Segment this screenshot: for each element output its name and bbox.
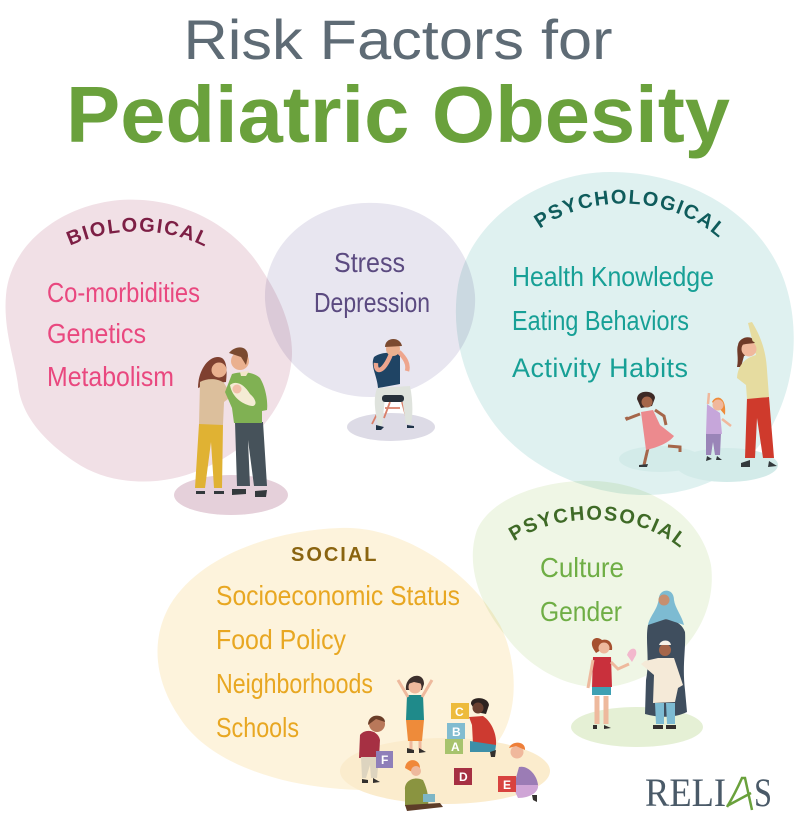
text block: psychosocial: [508, 506, 682, 627]
logo: Relias: [645, 770, 772, 815]
text block: social: SOCIAL: [291, 544, 378, 566]
text block: stress: Depression: [314, 287, 430, 318]
panel: stress blob: [265, 203, 475, 397]
icon: children with alphabet blocks: B: [452, 725, 461, 739]
icon: woman and children exercising: [619, 322, 778, 482]
text block: social: Schools: [216, 712, 299, 743]
icon: children with alphabet blocks: D: [459, 770, 468, 784]
icon: stressed man on chair: [347, 339, 435, 441]
text block: psychological: Activity Habits: [512, 353, 688, 383]
logo: Relias: S: [754, 770, 772, 815]
icon: family with baby: [174, 347, 288, 515]
text block: psychosocial: PSYCHOSOCIAL: [508, 506, 682, 548]
text block: social: Socioeconomic Status: [216, 580, 460, 611]
text block: biological: [47, 218, 206, 392]
text block: psychosocial: Culture: [540, 552, 624, 583]
text block: biological: Genetics: [47, 318, 146, 349]
icon: children with alphabet blocks: A: [451, 740, 460, 754]
text block: psychological: [512, 190, 722, 383]
title: Risk Factors for: [184, 8, 612, 71]
text block: social: Neighborhoods: [216, 668, 373, 699]
icon: children with alphabet blocks: F: [381, 753, 388, 767]
text block: biological: BIOLOGICAL: [66, 218, 206, 246]
text block: stress: Stress: [334, 247, 405, 278]
icon: children with alphabet blocks: E: [503, 778, 511, 792]
text block: biological: Metabolism: [47, 361, 174, 392]
text block: stress: [314, 247, 430, 318]
panel: psychosocial blob: [473, 481, 712, 687]
title: Pediatric Obesity: [66, 70, 731, 159]
text block: psychological: Health Knowledge: [512, 261, 714, 292]
text block: psychosocial: Gender: [540, 596, 622, 627]
panel: psychological blob: [456, 172, 794, 495]
text block: biological: Co-morbidities: [47, 277, 200, 308]
text block: psychological: PSYCHOLOGICAL: [533, 190, 722, 238]
icon: mother and children sharing candy: [571, 591, 703, 747]
logo: Relias: RELI: [645, 770, 726, 815]
text block: social: Food Policy: [216, 624, 346, 655]
title: [66, 8, 731, 159]
icon: children with alphabet blocks: C: [455, 705, 464, 719]
text block: psychological: Eating Behaviors: [512, 305, 689, 336]
panel: biological blob: [6, 200, 292, 482]
text block: social: [216, 544, 460, 743]
panel: social blob: [158, 528, 514, 790]
icon: children with alphabet blocks: [340, 676, 550, 811]
